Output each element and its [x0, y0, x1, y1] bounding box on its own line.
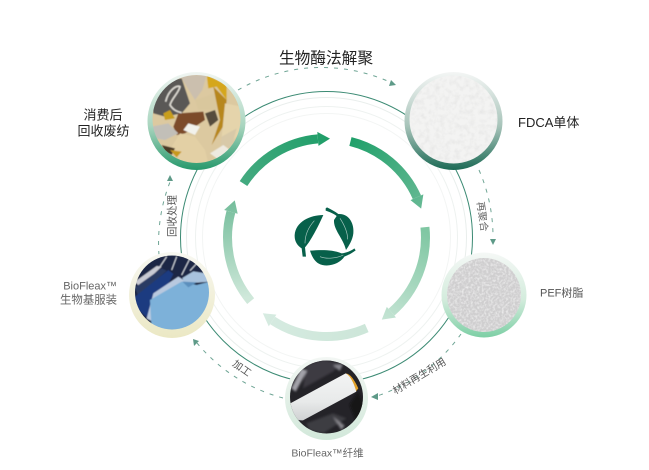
label: material recycling: 材料再生利用: [390, 355, 448, 397]
arrow segment 3: [353, 227, 458, 325]
ring: [442, 252, 526, 338]
photo: resin pellets: [447, 258, 521, 332]
label: PEF resin: PEF树脂: [540, 286, 583, 300]
node: post-consumer textile waste: [148, 72, 246, 170]
label: post-consumer textile waste: 消费后: [83, 108, 123, 122]
arrow segment 5: [198, 198, 281, 301]
concentric guide rings: [180, 92, 472, 384]
ring: [404, 72, 502, 170]
arrowheads for the dashed arrows: [167, 80, 496, 400]
arrow segment 2: [350, 125, 427, 223]
circular arrow ring: [198, 125, 458, 375]
arrow segment 4: [259, 272, 367, 375]
label: post-consumer textile waste: [77, 108, 130, 138]
node: FDCA monomer: [404, 72, 502, 170]
label: BioFleax fibre: BioFleax™纤维: [291, 446, 364, 460]
node: BioFleax biobased garments: [129, 252, 215, 338]
node: BioFleax fibre: [285, 357, 368, 440]
photo: shirts on hangers: [133, 255, 210, 332]
arrow segment 1: [244, 132, 330, 184]
label: BioFleax biobased garments: 生物基服装: [60, 292, 117, 306]
label: post-consumer textile waste: 回收废纺: [77, 124, 130, 138]
ring: [129, 252, 215, 338]
icon: three leaves logo: [295, 207, 356, 265]
label: processing: 加工: [230, 358, 253, 379]
ring: [285, 357, 368, 440]
title: enzymatic depolymerization: 生物酶法解聚: [279, 50, 373, 68]
photo: white powder: [409, 75, 499, 165]
label: re-polymerization: 再聚合: [474, 201, 491, 232]
ring: [148, 72, 246, 170]
photo: textile scraps: [152, 75, 240, 163]
photo: fibre spool on satin: [288, 358, 365, 435]
label: BioFleax biobased garments: BioFleax™: [63, 280, 117, 292]
dashed process arrows: [159, 67, 493, 398]
label: FDCA monomer: FDCA单体: [518, 115, 579, 130]
label: BioFleax biobased garments: [60, 280, 117, 306]
node: PEF resin: [442, 252, 526, 338]
label: recycling treatment: 回收处理: [166, 195, 178, 237]
